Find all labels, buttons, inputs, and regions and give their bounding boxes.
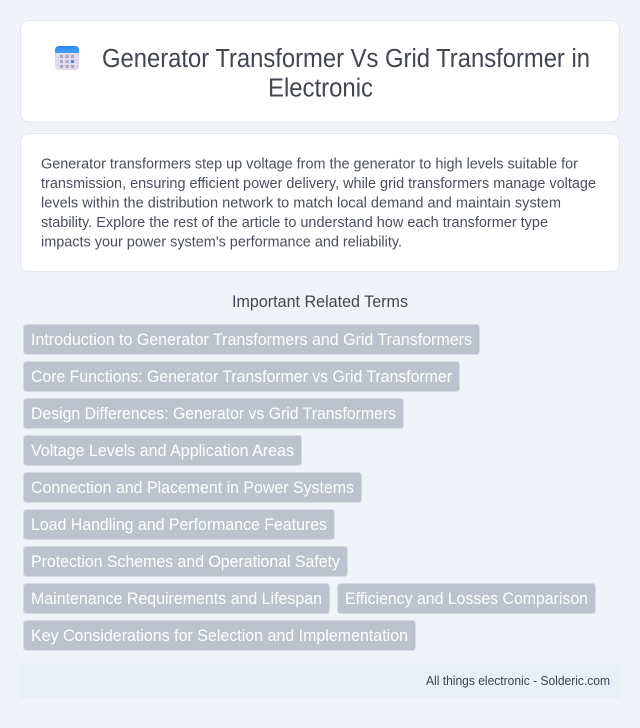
tag: protection schemes [24,546,348,576]
tag: efficiency [338,584,596,614]
panel: title card [20,20,620,122]
tag: introduction [24,324,480,354]
footer [20,664,620,698]
tag: core functions [24,362,460,392]
heading: important related terms: Important Related Terms [232,293,408,311]
summary text [41,155,596,250]
summary text: levels within the distribution network to match local demand and maintain system [41,194,561,211]
footer: All things electronic - Solderic.com [426,674,610,688]
tag: protection schemes: Protection Schemes and Operational Safety [31,553,341,571]
panel: summary [20,134,620,272]
tag: design differences [24,398,404,428]
title: Generator Transformer Vs Grid Transformer in [102,45,590,73]
icon: calendar [55,46,79,70]
tag: key considerations [24,620,416,650]
tag: maintenance: Maintenance Requirements and Lifespan [31,590,322,608]
tag: voltage levels: Voltage Levels and Application Areas [31,442,294,460]
tag: load handling [24,510,334,540]
summary text: stability. Explore the rest of the article to understand how each transformer type [41,214,548,231]
tag: connection and placement: Connection and Placement in Power Systems [31,479,354,497]
tag: core functions: Core Functions: Generator Transformer vs Grid Transformer [31,368,452,386]
title [102,45,590,102]
tag list [24,324,596,650]
tag: efficiency: Efficiency and Losses Comparison [345,590,588,608]
summary text: Generator transformers step up voltage from the generator to high levels suitable for [41,155,578,172]
tag: key considerations: Key Considerations for Selection and Implementation [31,627,408,645]
tag: connection and placement [24,472,362,502]
summary text: impacts your power system's performance and reliability. [41,233,402,250]
tag: voltage levels [24,436,302,466]
title: Electronic [268,74,373,102]
tag: load handling: Load Handling and Performance Features [31,516,327,534]
tag: maintenance [24,584,330,614]
tag: introduction: Introduction to Generator Transformers and Grid Transformers [31,331,472,349]
tag: design differences: Design Differences: Generator vs Grid Transformers [31,405,396,423]
summary text: transmission, ensuring efficient power delivery, while grid transformers manage voltage [41,175,596,192]
